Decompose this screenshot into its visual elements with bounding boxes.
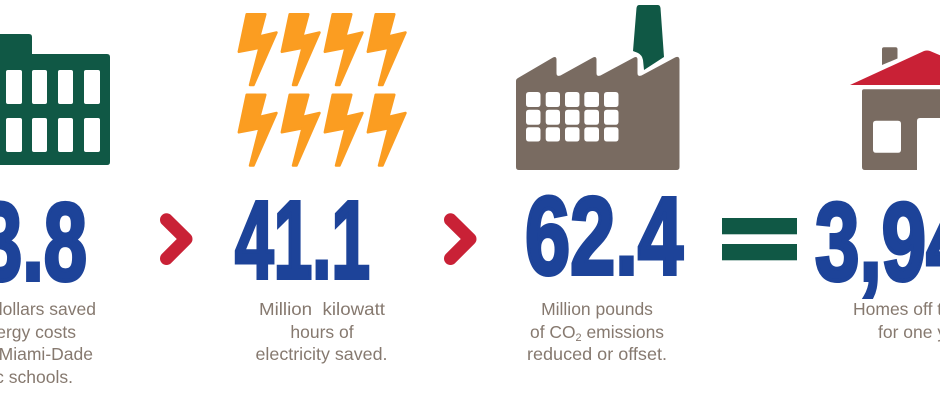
panel: electricity saved bbox=[235, 14, 406, 364]
caption: electricity saved bbox=[256, 299, 388, 364]
icon: house bbox=[850, 47, 940, 170]
caption: CO2 emissions: Million pounds bbox=[541, 299, 653, 319]
panel: CO2 emissions bbox=[516, 5, 683, 364]
arrow: greater-than chevron 1 bbox=[166, 220, 186, 258]
number: 62.4: 62.4 bbox=[525, 175, 683, 298]
arrow: greater-than chevron 2 bbox=[450, 220, 470, 258]
caption: CO2 emissions: reduced or offset. bbox=[527, 344, 667, 364]
icon: factory bbox=[516, 5, 680, 170]
house body bbox=[862, 89, 940, 170]
caption: homes off the grid bbox=[853, 299, 940, 342]
panel: homes off the grid bbox=[815, 47, 940, 342]
caption: electricity saved: electricity saved. bbox=[256, 344, 388, 364]
caption: electricity saved: Million kilowatt bbox=[259, 299, 385, 319]
caption: electricity saved: hours of bbox=[290, 322, 354, 342]
factory building bbox=[516, 57, 680, 170]
house chimney bbox=[882, 47, 898, 65]
panel: dollars saved bbox=[0, 34, 110, 387]
caption: dollars saved bbox=[0, 299, 96, 387]
icon: equals sign bbox=[722, 218, 797, 260]
caption: CO2 emissions: emissions bbox=[582, 322, 664, 342]
caption: CO2 emissions bbox=[527, 299, 667, 364]
factory chimney bbox=[633, 5, 664, 70]
caption: CO2 emissions: of CO bbox=[530, 322, 576, 342]
number: 41.1: 41.1 bbox=[235, 179, 370, 302]
icon: eight lightning bolts bbox=[239, 14, 406, 165]
icon: school building bbox=[0, 34, 110, 165]
house roof bbox=[850, 50, 940, 85]
caption: CO2 emissions: 2 bbox=[576, 332, 582, 344]
